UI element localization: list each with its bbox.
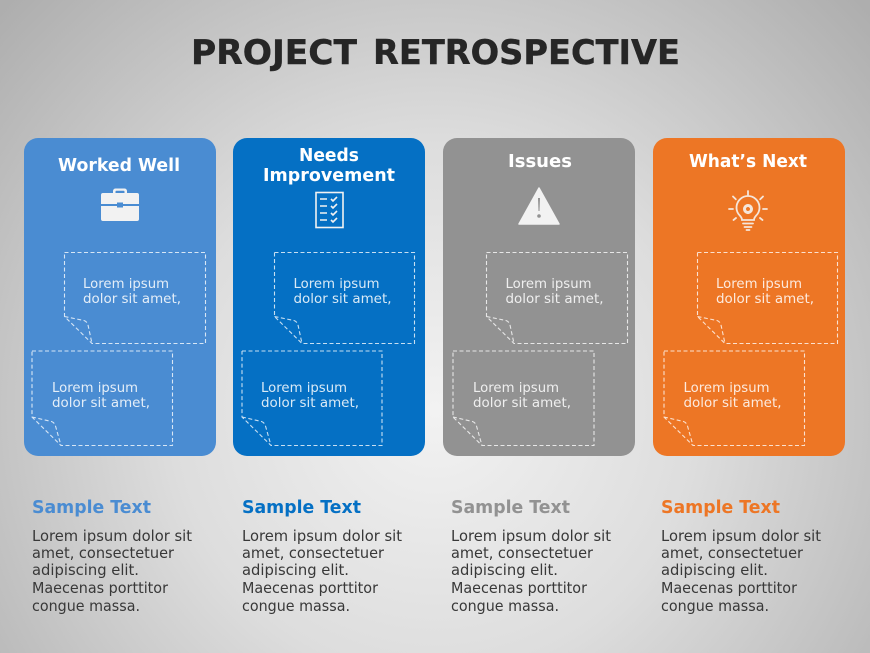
note: lower [242, 351, 382, 446]
heading: needs improvement: Needs [299, 145, 359, 166]
text block: column 2: Maecenas porttitor [242, 579, 379, 597]
heading: needs improvement [263, 145, 395, 186]
text block: column 3: amet, consectetuer [451, 544, 594, 562]
icon: checklist [316, 192, 343, 228]
note: upper: Lorem ipsum [716, 276, 802, 292]
panel: worked well [24, 138, 216, 456]
panel: needs improvement [233, 138, 425, 456]
text block: column 2: Sample Text [242, 497, 361, 518]
note: lower: dolor sit amet, [52, 395, 150, 411]
text block: column 1: adipiscing elit. [32, 561, 139, 579]
note: lower: Lorem ipsum [473, 380, 559, 396]
note: lower: dolor sit amet, [473, 395, 571, 411]
text block: column 3 [451, 497, 611, 615]
text block: column 4 [661, 497, 821, 615]
title: PROJECT [191, 33, 358, 73]
text block: column 4: Lorem ipsum dolor sit [661, 527, 821, 545]
text block: column 1: congue massa. [32, 597, 140, 615]
note: lower [32, 351, 172, 446]
text block: column 1: amet, consectetuer [32, 544, 175, 562]
note: lower: Lorem ipsum [261, 380, 347, 396]
note: lower [664, 351, 804, 446]
note: lower: dolor sit amet, [684, 395, 782, 411]
text block: column 2: Lorem ipsum dolor sit [242, 527, 402, 545]
note: lower: dolor sit amet, [261, 395, 359, 411]
note: upper [64, 252, 206, 344]
heading: needs improvement: Improvement [263, 165, 395, 186]
text block: column 4: adipiscing elit. [661, 561, 768, 579]
text block: column 4: Sample Text [661, 497, 780, 518]
note: lower: Lorem ipsum [52, 380, 138, 396]
text block: column 2 [242, 497, 402, 615]
note: upper: dolor sit amet, [294, 291, 392, 307]
heading: issues: Issues [508, 151, 572, 172]
icon: warning triangle [519, 188, 559, 224]
text block: column 1: Lorem ipsum dolor sit [32, 527, 192, 545]
text block: column 3: Lorem ipsum dolor sit [451, 527, 611, 545]
text block: column 4: Maecenas porttitor [661, 579, 798, 597]
icon: light bulb with gear [729, 191, 767, 230]
text block: column 4: congue massa. [661, 597, 769, 615]
note: lower [453, 351, 594, 446]
note: upper: dolor sit amet, [506, 291, 604, 307]
title: RETROSPECTIVE [373, 33, 680, 73]
text block: column 2: adipiscing elit. [242, 561, 349, 579]
text block: column 3: Maecenas porttitor [451, 579, 588, 597]
text block: column 3: adipiscing elit. [451, 561, 558, 579]
note: upper [698, 252, 838, 344]
heading: worked well: Worked Well [58, 155, 180, 176]
text block: column 1: Maecenas porttitor [32, 579, 169, 597]
text block: column 4: amet, consectetuer [661, 544, 804, 562]
text block: column 1: Sample Text [32, 497, 151, 518]
note: upper: dolor sit amet, [83, 291, 181, 307]
text block: column 2: congue massa. [242, 597, 350, 615]
panel: what's next [653, 138, 845, 456]
note: upper: dolor sit amet, [716, 291, 814, 307]
note: upper: Lorem ipsum [83, 276, 169, 292]
text block: column 1 [32, 497, 192, 615]
text block: column 2: amet, consectetuer [242, 544, 385, 562]
note: upper: Lorem ipsum [506, 276, 592, 292]
note: upper: Lorem ipsum [294, 276, 380, 292]
icon: briefcase [101, 188, 139, 221]
note: upper [486, 252, 628, 344]
note: lower: Lorem ipsum [684, 380, 770, 396]
text block: column 3: congue massa. [451, 597, 559, 615]
title [191, 33, 680, 73]
panel: issues [443, 138, 635, 456]
note: upper [274, 252, 414, 344]
heading: what's next: What’s Next [689, 151, 807, 172]
text block: column 3: Sample Text [451, 497, 570, 518]
